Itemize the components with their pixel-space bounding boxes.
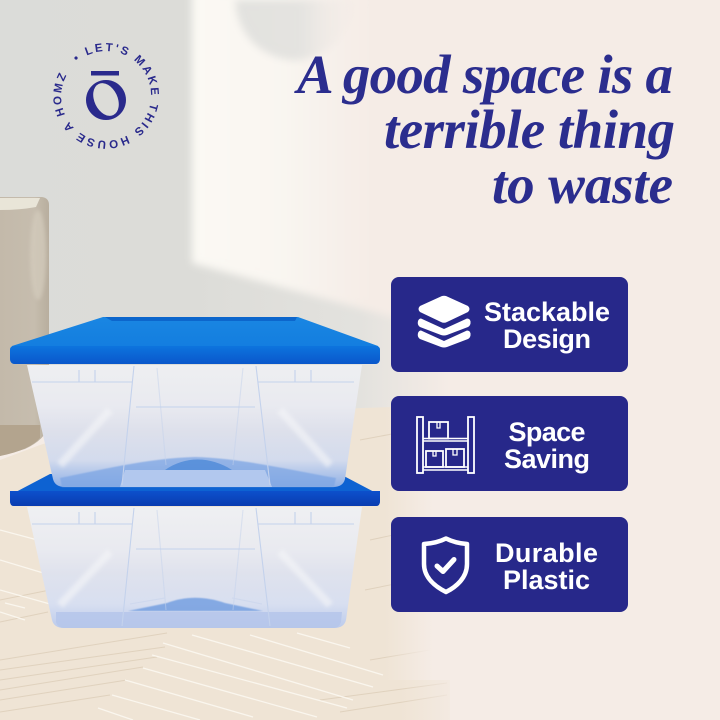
label: space saving: [504, 417, 590, 474]
title: [294, 44, 675, 215]
bottom lid: [10, 474, 380, 506]
title: A good space is a: [294, 44, 673, 105]
label: stackable design: [484, 297, 610, 354]
logo mark: [86, 71, 126, 120]
label: space saving: Saving: [504, 444, 590, 474]
panel: durable plastic: [391, 517, 628, 612]
top tub: [27, 365, 362, 487]
product: stacked storage tubs: [10, 317, 380, 628]
planter pot: [0, 197, 49, 456]
bottom tub: [27, 507, 362, 628]
label: durable plastic: [495, 538, 598, 595]
label: durable plastic: Plastic: [503, 565, 590, 595]
logo badge: [53, 43, 159, 149]
label: durable plastic: Durable: [495, 538, 598, 568]
title: terrible thing: [384, 99, 675, 160]
top lid: [10, 317, 380, 364]
panel: space saving: [391, 396, 628, 491]
panel: stackable design: [391, 277, 628, 372]
logo ring text: • LET'S MAKE THIS HOUSE A HOMZ: [53, 43, 159, 149]
icon: stacked layers: [418, 296, 471, 348]
title: to waste: [492, 154, 673, 215]
label: stackable design: Design: [503, 324, 591, 354]
icon: shield with check: [424, 538, 467, 592]
label: stackable design: Stackable: [484, 297, 610, 327]
icon: shelf with boxes: [417, 417, 474, 473]
label: space saving: Space: [508, 417, 586, 447]
